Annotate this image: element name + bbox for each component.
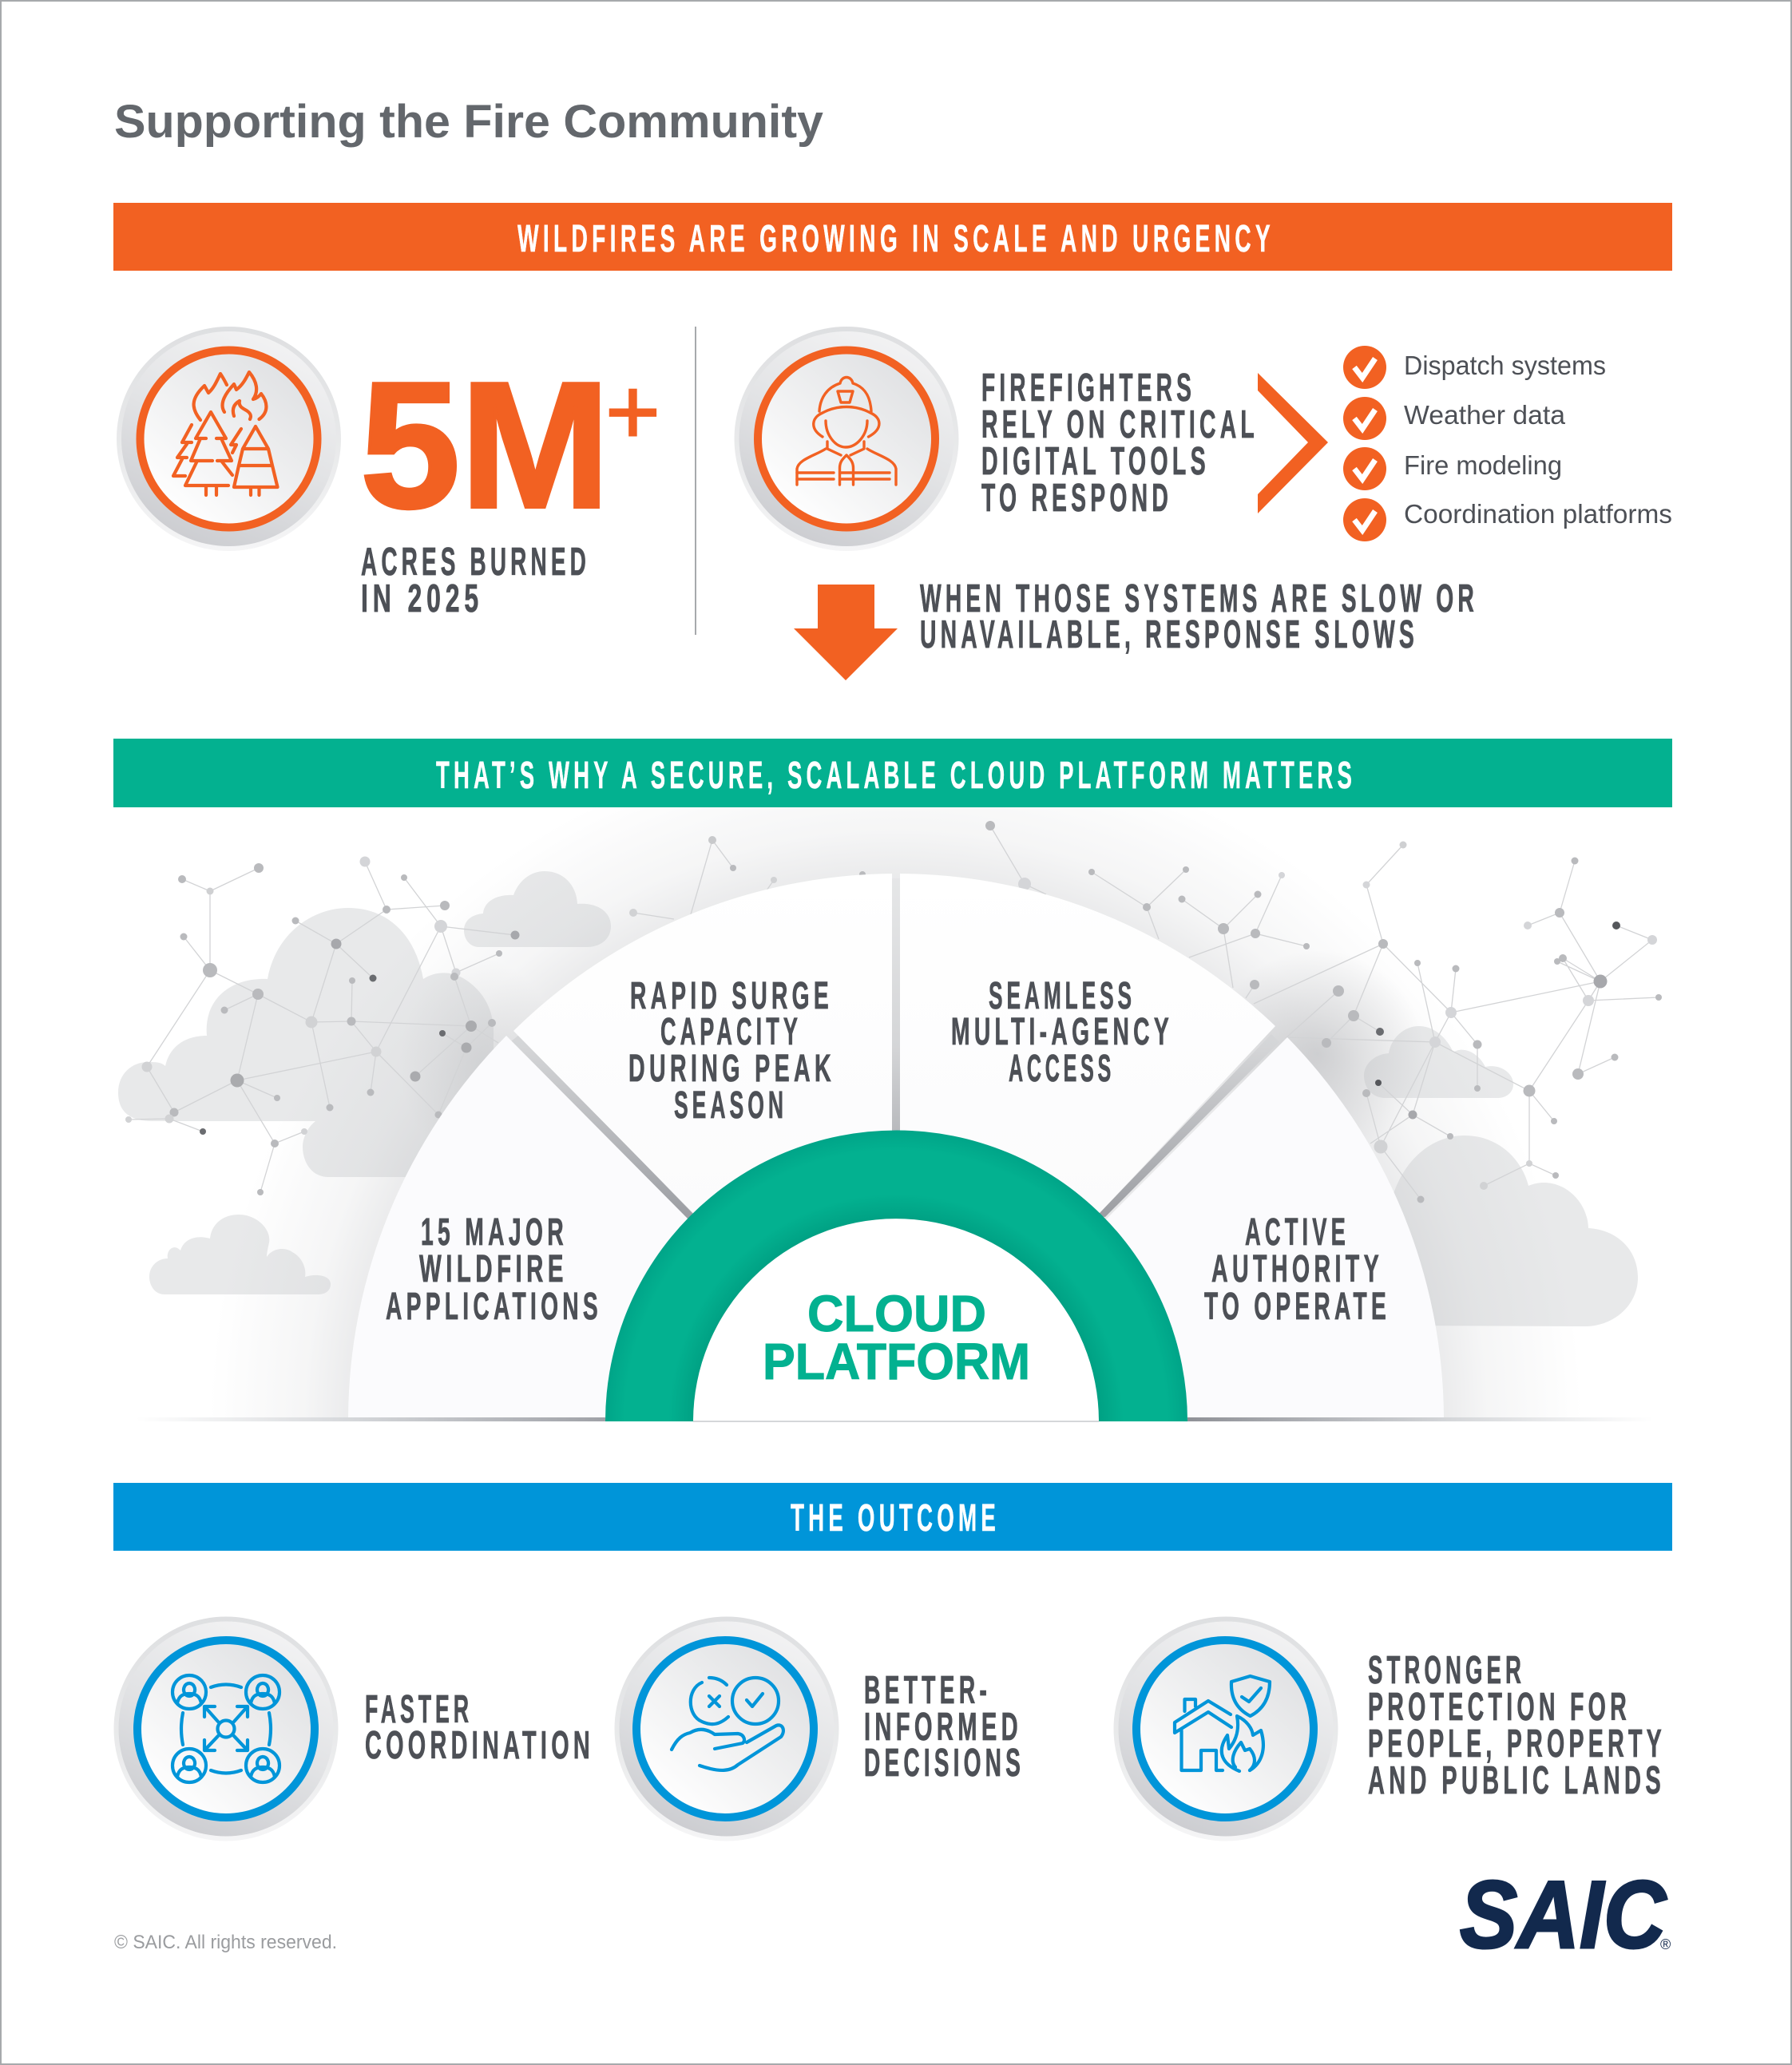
ring: cloud platform: CLOUD xyxy=(807,1285,986,1342)
network: left xyxy=(125,856,519,1195)
item: weather data: Weather data xyxy=(1404,400,1566,430)
arrow: chevron xyxy=(1258,373,1328,513)
banner: wildfires: WILDFIRES ARE GROWING IN SCALE AND URGENCY xyxy=(517,218,1275,260)
fan gap strips xyxy=(511,878,1279,1219)
text: firefighters rely on critical digital tools: DIGITAL TOOLS xyxy=(981,440,1210,483)
item: coordination platforms: Coordination platforms xyxy=(1404,499,1672,529)
label: faster coordination: FASTER xyxy=(365,1688,473,1731)
cloud: big right xyxy=(1394,1136,1638,1326)
panel: seamless multi-agency access: MULTI-AGENCY xyxy=(951,1011,1173,1053)
item: weather data xyxy=(1343,397,1566,440)
title: Supporting the Fire Community xyxy=(114,96,823,148)
badge: house and shield icon xyxy=(1113,1616,1338,1841)
network: right xyxy=(985,821,1662,1203)
panel: 15 major wildfire applications: APPLICATIONS xyxy=(386,1286,602,1328)
item: fire modeling: Fire modeling xyxy=(1404,450,1562,480)
label: stronger protection: STRONGER xyxy=(1368,1649,1525,1692)
copyright: © SAIC. All rights reserved. xyxy=(114,1932,337,1953)
label: better-informed decisions xyxy=(864,1669,1025,1785)
banner: cloud platform xyxy=(113,739,1672,807)
text: firefighters rely on critical digital tools: RELY ON CRITICAL xyxy=(981,403,1259,446)
label: better-informed decisions: INFORMED xyxy=(864,1706,1022,1749)
badge: decisions icon xyxy=(615,1616,839,1841)
banner: wildfires xyxy=(113,203,1672,271)
text: when systems are slow: UNAVAILABLE, RESPONSE SLOWS xyxy=(920,613,1418,656)
panel: seamless multi-agency access: SEAMLESS xyxy=(989,975,1136,1017)
label: faster coordination xyxy=(365,1688,594,1767)
cloud platform fan diagram xyxy=(136,874,1653,1422)
network: top center xyxy=(629,836,866,919)
banner: the outcome xyxy=(113,1483,1672,1551)
panel: seamless multi-agency access: ACCESS xyxy=(1009,1048,1115,1090)
panel: rapid surge capacity: RAPID SURGE xyxy=(630,975,833,1017)
badge: firefighter icon xyxy=(735,327,958,551)
panel: active authority to operate: AUTHORITY xyxy=(1211,1248,1383,1290)
label: acres burned: IN 2025 xyxy=(361,577,483,620)
logo: SAIC: SAIC xyxy=(1460,1861,1667,1968)
panel: active authority to operate: TO OPERATE xyxy=(1204,1286,1390,1328)
clouds background xyxy=(118,871,1638,1326)
item: fire modeling xyxy=(1343,447,1562,490)
banner: the outcome: THE OUTCOME xyxy=(791,1497,1000,1540)
ring: cloud platform: PLATFORM xyxy=(763,1333,1030,1390)
panel: 15 major wildfire applications: 15 MAJOR xyxy=(421,1211,568,1254)
panel: rapid surge capacity: DURING PEAK xyxy=(628,1048,835,1090)
fan halo shadow xyxy=(80,807,1712,1417)
cloud: small lower left xyxy=(149,1215,331,1294)
stat: 5M+: + xyxy=(605,359,660,465)
text: when systems are slow xyxy=(920,577,1478,656)
divider xyxy=(695,327,696,635)
label: stronger protection xyxy=(1368,1649,1666,1802)
badge: forest fire icon xyxy=(117,327,341,551)
text: firefighters rely on critical digital tools xyxy=(981,367,1259,520)
checklist xyxy=(1343,346,1672,541)
cloud: small right xyxy=(1364,1026,1513,1098)
text: firefighters rely on critical digital tools: TO RESPOND xyxy=(981,477,1172,520)
label: better-informed decisions: DECISIONS xyxy=(864,1742,1025,1785)
item: dispatch systems: Dispatch systems xyxy=(1404,351,1606,380)
arrow: down xyxy=(794,585,898,680)
panel: 15 major wildfire applications xyxy=(348,1036,688,1417)
panel: 15 major wildfire applications: WILDFIRE xyxy=(419,1248,568,1290)
panel: active authority to operate: ACTIVE xyxy=(1245,1211,1350,1254)
item: coordination platforms xyxy=(1343,498,1672,541)
label: better-informed decisions: BETTER- xyxy=(864,1669,991,1712)
logo: SAIC: ® xyxy=(1660,1936,1671,1952)
text: firefighters rely on critical digital tools: FIREFIGHTERS xyxy=(981,367,1195,410)
stat: 5M+: 5M xyxy=(360,344,610,545)
panel: rapid surge capacity: SEASON xyxy=(674,1084,787,1127)
label: acres burned: ACRES BURNED xyxy=(361,541,590,584)
cloud: small top left xyxy=(464,871,611,947)
panel: active authority to operate xyxy=(1106,1037,1444,1417)
panel: rapid surge capacity xyxy=(513,874,892,1213)
panel: rapid surge capacity: CAPACITY xyxy=(660,1011,802,1053)
base line xyxy=(136,1417,1653,1421)
badge: coordination icon xyxy=(113,1616,339,1841)
panel: seamless multi-agency access xyxy=(900,874,1275,1214)
label: acres burned xyxy=(361,541,590,620)
ring: cloud platform xyxy=(605,1131,1187,1422)
label: faster coordination: COORDINATION xyxy=(365,1724,594,1767)
item: dispatch systems xyxy=(1343,346,1606,389)
cloud: large left xyxy=(118,908,494,1177)
